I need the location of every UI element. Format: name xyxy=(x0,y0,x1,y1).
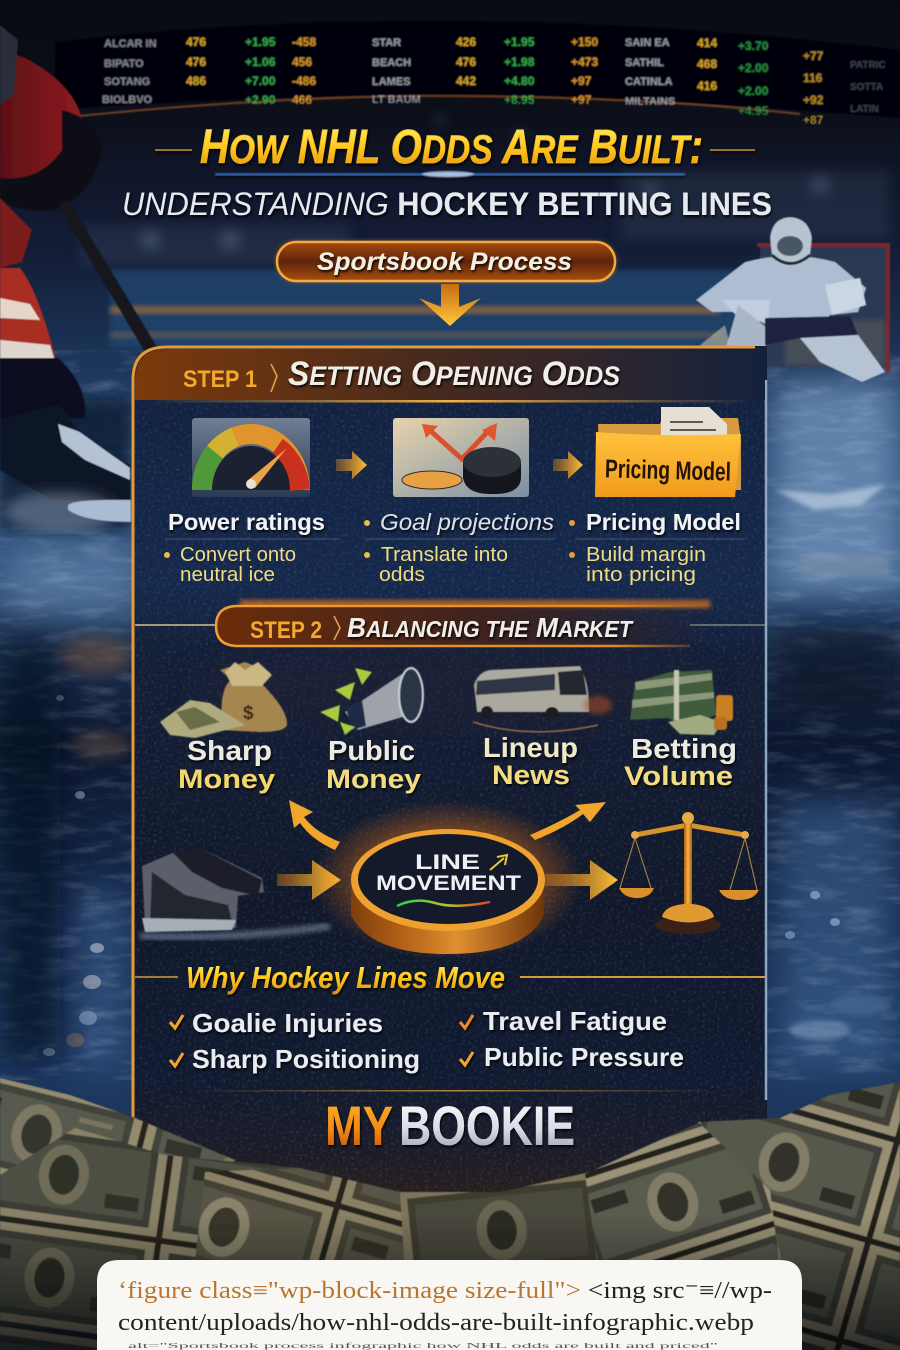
scoreboard ticker: CATINLA xyxy=(625,76,673,88)
label: betting volume: Betting xyxy=(631,733,737,764)
scoreboard ticker xyxy=(55,21,900,127)
icon: pricing model folder xyxy=(595,407,741,497)
icon: megaphone xyxy=(320,668,423,735)
code snippet box: alt="Sportsbook process infographic how NHL odds are built and priced" xyxy=(128,1342,718,1350)
sportsbook process pill: Sportsbook Process xyxy=(317,248,572,276)
scoreboard ticker: +150 xyxy=(571,35,598,49)
icon: pricing model folder: Pricing Model xyxy=(605,453,731,487)
sportsbook process pill xyxy=(110,241,745,282)
code snippet box: ‘figure class≡"wp-block-image size-full"> <img src⁻≡//wp- xyxy=(118,1278,772,1304)
scoreboard ticker: PATRIC xyxy=(850,60,886,71)
code snippet box: content/uploads/how-nhl-odds-are-built-infographic.webp xyxy=(118,1310,754,1336)
scoreboard ticker: 414 xyxy=(697,36,717,50)
scoreboard ticker: 468 xyxy=(697,57,717,71)
scoreboard ticker: +2.90 xyxy=(245,93,276,107)
label: public money: Money xyxy=(326,764,421,794)
line movement puck: LINE xyxy=(415,851,480,874)
scoreboard ticker: 466 xyxy=(292,93,312,107)
arrow: curved left xyxy=(289,800,340,850)
step 2 header: STEP 2 xyxy=(250,617,322,644)
label: betting volume: Volume xyxy=(624,761,733,791)
step 1 header xyxy=(135,349,765,402)
scoreboard ticker: +4.95 xyxy=(738,104,769,118)
subtitle: UNDERSTANDING HOCKEY BETTING LINES xyxy=(122,186,772,222)
scoreboard ticker: 416 xyxy=(697,79,717,93)
logo: MyBookie: BOOKIE xyxy=(399,1094,575,1157)
column: goal projections: Translate into xyxy=(381,544,508,566)
label: sharp money xyxy=(178,735,275,794)
column: goal projections xyxy=(364,509,555,586)
scoreboard ticker: ALCAR IN xyxy=(104,38,157,50)
label: sharp money: Sharp xyxy=(187,735,272,766)
column: power ratings: Power ratings xyxy=(168,509,325,535)
arrow: curved right xyxy=(530,802,606,840)
scoreboard ticker: 486 xyxy=(186,74,206,88)
scoreboard ticker: SAIN EA xyxy=(625,37,670,49)
scoreboard ticker: +87 xyxy=(803,113,824,127)
label: betting volume xyxy=(624,733,737,791)
icon: cash stacks xyxy=(630,670,733,735)
scoreboard ticker: +97 xyxy=(571,93,592,107)
checklist: Travel Fatigue xyxy=(483,1006,667,1036)
scoreboard ticker: -458 xyxy=(292,35,316,49)
scoreboard ticker: +4.80 xyxy=(504,74,535,88)
scoreboard ticker: +1.95 xyxy=(245,35,276,49)
scoreboard ticker: 442 xyxy=(456,74,476,88)
column: pricing model: Pricing Model xyxy=(586,509,741,535)
goalie and net xyxy=(696,217,888,382)
scoreboard ticker: +2.00 xyxy=(738,61,769,75)
divider xyxy=(190,1090,720,1092)
label: lineup news: Lineup xyxy=(483,732,578,763)
label: public money xyxy=(326,735,421,794)
column: pricing model: Build margin xyxy=(586,544,706,566)
icon: balance scales xyxy=(619,812,759,934)
icon: puck with arrows xyxy=(393,418,529,497)
scoreboard ticker: STAR xyxy=(372,37,401,49)
column: power ratings: neutral ice xyxy=(180,564,275,586)
scoreboard ticker: LT BAUM xyxy=(372,94,421,106)
hockey player xyxy=(0,25,160,532)
scoreboard ticker: +7.00 xyxy=(245,74,276,88)
scoreboard ticker: 456 xyxy=(292,55,312,69)
scoreboard ticker: +2.00 xyxy=(738,84,769,98)
label: public money: Public xyxy=(328,735,415,766)
scoreboard ticker: +1.98 xyxy=(504,55,535,69)
scoreboard ticker: +1.95 xyxy=(504,35,535,49)
logo: MyBookie xyxy=(325,1094,575,1157)
arrow xyxy=(336,451,367,479)
scoreboard ticker: LATIN xyxy=(850,104,879,115)
column: goal projections: odds xyxy=(379,564,425,586)
scoreboard ticker: SOTANG xyxy=(104,76,150,88)
step 1 header: STEP 1 xyxy=(183,366,257,393)
arrow xyxy=(553,451,583,479)
scoreboard ticker: +77 xyxy=(803,49,824,63)
main panel xyxy=(133,346,767,1200)
scoreboard ticker: 476 xyxy=(456,55,476,69)
column: pricing model: into pricing xyxy=(586,564,696,586)
arrow: into puck xyxy=(277,860,341,900)
scoreboard ticker: SATHIL xyxy=(625,57,664,69)
scoreboard ticker: +92 xyxy=(803,93,824,107)
scoreboard ticker: -486 xyxy=(292,74,316,88)
label: sharp money: Money xyxy=(178,764,275,794)
scoreboard ticker: +8.95 xyxy=(504,93,535,107)
checklist: Public Pressure xyxy=(484,1042,684,1072)
line movement puck: MOVEMENT xyxy=(376,872,521,895)
step 1 header: SETTING OPENING ODDS xyxy=(288,355,620,393)
arrow: process down xyxy=(419,284,481,326)
logo: MyBookie: MY xyxy=(325,1094,393,1157)
scoreboard ticker: 426 xyxy=(456,35,476,49)
icon: money bag xyxy=(160,662,287,738)
arrow: out of puck xyxy=(545,860,618,900)
scoreboard ticker: LAMES xyxy=(372,76,410,88)
scoreboard ticker: BIPATO xyxy=(104,58,144,70)
column: power ratings: Convert onto xyxy=(180,544,296,566)
section: why hockey lines move: Why Hockey Lines Move xyxy=(186,960,505,995)
column: goal projections: Goal projections xyxy=(380,509,555,535)
scoreboard ticker: +97 xyxy=(571,74,592,88)
scoreboard ticker: MILTAINS xyxy=(625,96,675,108)
scoreboard ticker: +3.70 xyxy=(738,39,769,53)
column: power ratings xyxy=(164,509,340,586)
scoreboard ticker: 476 xyxy=(186,55,206,69)
line movement puck xyxy=(313,800,583,960)
scoreboard ticker: +1.06 xyxy=(245,55,276,69)
step 2 header xyxy=(135,600,765,646)
scoreboard ticker: +473 xyxy=(571,55,598,69)
rink surface xyxy=(110,270,770,348)
icon: gauge xyxy=(192,418,310,497)
scoreboard ticker: 116 xyxy=(803,71,823,85)
crowd in stands xyxy=(80,115,890,265)
checklist xyxy=(170,1006,684,1074)
label: lineup news: News xyxy=(492,760,570,790)
label: lineup news xyxy=(483,732,578,790)
checklist: Sharp Positioning xyxy=(192,1044,420,1074)
title: HOW NHL ODDS ARE BUILT: xyxy=(200,121,703,174)
pile of money xyxy=(0,1078,900,1350)
code snippet box xyxy=(97,1260,802,1350)
icon: team bus xyxy=(473,666,612,732)
scoreboard ticker: BEACH xyxy=(372,57,411,69)
column: pricing model xyxy=(569,509,745,586)
icon: money bag: $ xyxy=(243,703,254,724)
step 2 header: BALANCING THE MARKET xyxy=(347,612,634,643)
icon: hockey skates xyxy=(140,848,330,937)
scoreboard ticker: SOTTA xyxy=(850,82,883,93)
checklist: Goalie Injuries xyxy=(192,1008,383,1038)
scoreboard ticker: 476 xyxy=(186,35,206,49)
scoreboard ticker: BIOLBVO xyxy=(102,94,153,106)
